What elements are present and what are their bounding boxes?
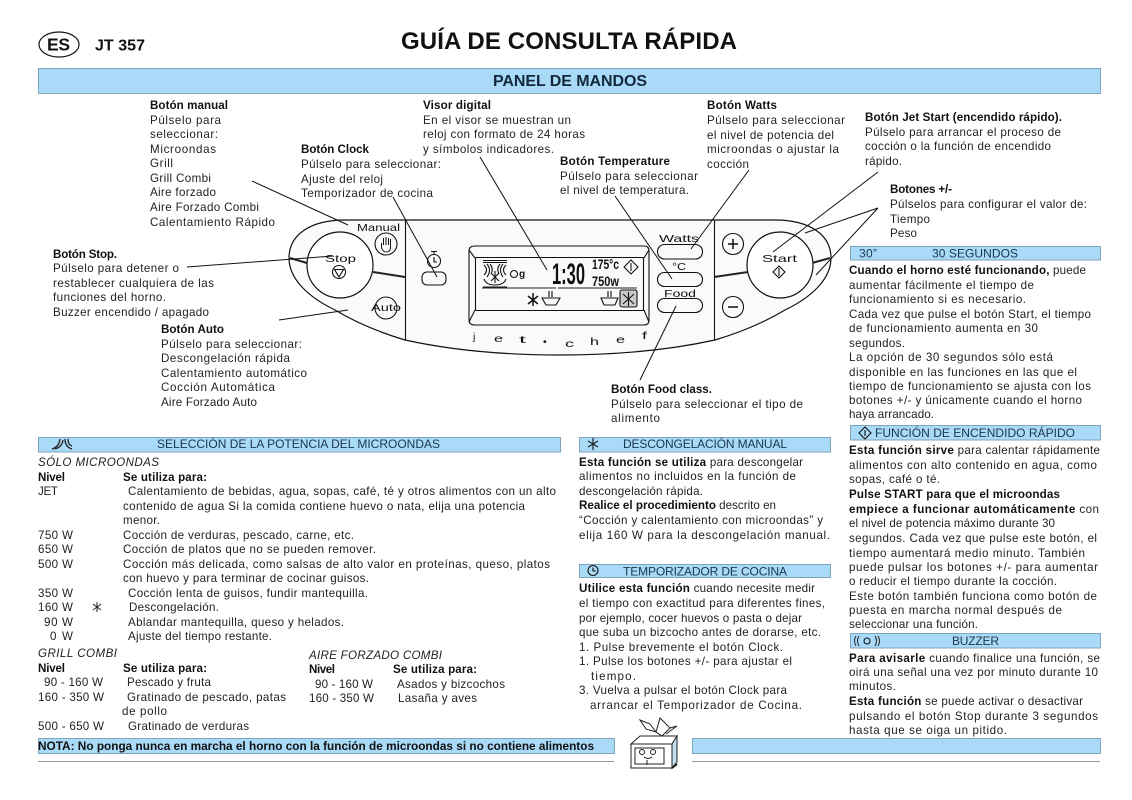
label: botón clock (301, 143, 441, 200)
label: botón clock: Botón Clock (301, 143, 370, 156)
label: botón manual: seleccionar: (150, 128, 218, 141)
label: botón watts: Púlselo para seleccionar (707, 114, 845, 127)
auto button: Auto (371, 302, 401, 314)
text: descongelación manual: Esta función se utiliza para descongelar (579, 456, 803, 469)
table: sólo microondas: Ajuste del tiempo restante. (128, 630, 272, 643)
table: sólo microondas: JET (38, 485, 58, 498)
table: grill combi: Nivel (38, 662, 65, 675)
table: sólo microondas: 90 W (44, 616, 73, 629)
table: sólo microondas: 0 W (50, 630, 73, 643)
icon: weight: g (519, 269, 525, 280)
heading: panel de mandos: PANEL DE MANDOS (493, 73, 647, 90)
table: sólo microondas: 160 W (38, 601, 73, 614)
label: botón auto: Botón Auto (161, 323, 224, 336)
text: función de encendido rápido (849, 444, 1100, 631)
table: grill combi: Gratinado de pescado, patas (127, 691, 286, 704)
table: sólo microondas: SÓLO MICROONDAS (38, 456, 159, 469)
model code: JT 357 (95, 38, 145, 54)
jetchef logo: t (519, 334, 526, 346)
label: botón jet start: cocción o la función de encendido (865, 140, 1051, 153)
text: descongelación manual: Realice el procedimiento descrito en (579, 499, 776, 512)
label: botón jet start (865, 111, 1062, 168)
heading: 30 segundos (850, 246, 1100, 260)
title: GUÍA DE CONSULTA RÁPIDA (401, 27, 737, 55)
manual button (357, 222, 400, 255)
control panel (289, 220, 831, 355)
table: aire forzado combi: Asados y bizcochos (397, 678, 505, 691)
text: 30 segundos: Cuando el horno esté funcionando, puede (849, 264, 1086, 277)
jetchef logo: h (590, 336, 599, 348)
text: 30 segundos: segundos. (849, 337, 905, 350)
label: visor digital: Visor digital (423, 99, 491, 112)
table: grill combi: Se utiliza para: (123, 662, 207, 675)
text: función de encendido rápido: alimentos con alto contenido en agua, como (849, 459, 1097, 472)
table: sólo microondas: Se utiliza para: (123, 471, 207, 484)
text: función de encendido rápido: el nivel de potencia máximo durante 30 (849, 517, 1055, 530)
text: 30 segundos (849, 264, 1091, 421)
plus button (722, 234, 744, 254)
text: temporizador de cocina: el tiempo con exactitud para diferentes fines, (579, 597, 825, 610)
label: botón manual: Calentamiento Rápido (150, 216, 275, 229)
text: temporizador de cocina: Utilice esta función cuando necesite medir (579, 582, 815, 595)
text: 30 segundos: aumentar fácilmente el tiempo de (849, 279, 1034, 292)
table: aire forzado combi: AIRE FORZADO COMBI (308, 649, 443, 662)
table: aire forzado combi: Nivel (309, 663, 335, 676)
label: botón temperature: el nivel de temperatura. (560, 184, 689, 197)
label: botón stop: Buzzer encendido / apagado (53, 306, 209, 319)
table: sólo microondas: menor. (123, 514, 160, 527)
text: 30 segundos: funcionamiento si es necesario. (849, 293, 1026, 306)
label: botón jet start: rápido. (865, 155, 902, 168)
text: 30 segundos: tiempo de funcionamiento se ajusta con los (849, 380, 1091, 393)
text: buzzer: hasta que se oiga un pitido. (849, 724, 1007, 737)
label: botón stop (53, 248, 214, 319)
icon: defrost and bowl (528, 291, 560, 306)
manual button: Manual (357, 222, 400, 234)
text: función de encendido rápido: Este botón también funciona como botón de (849, 590, 1097, 603)
text: función de encendido rápido: tiempo aumentará medio minuto. También (849, 547, 1085, 560)
text: función de encendido rápido: Pulse START para que el microondas (849, 488, 1060, 501)
text: función de encendido rápido: puede pulsar los botones +/- para aumentar (849, 561, 1098, 574)
text: temporizador de cocina: 1. Pulse los botones +/- para ajustar el (579, 655, 792, 668)
label: botón auto: Descongelación rápida (161, 352, 291, 365)
table: grill combi: 160 - 350 W (38, 691, 104, 704)
table: sólo microondas (38, 456, 556, 643)
language badge (39, 32, 79, 57)
label: botón auto: Cocción Automática (161, 381, 276, 394)
table: grill combi: de pollo (122, 705, 167, 718)
text: temporizador de cocina: arrancar el Temporizador de Cocina. (590, 699, 802, 712)
table: sólo microondas: 500 W (38, 558, 73, 571)
label: botones +/- (890, 183, 1087, 240)
watts button (658, 233, 702, 259)
label: botón clock: Ajuste del reloj (301, 173, 383, 186)
power readout: 750w (592, 274, 619, 289)
text: descongelación manual: alimentos no incluidos en la función de (579, 470, 796, 483)
heading: panel de mandos (38, 68, 1100, 94)
jetchef logo: f (642, 330, 647, 342)
heading: buzzer: BUZZER (952, 634, 999, 648)
label: visor digital: reloj con formato de 24 horas (423, 128, 585, 141)
text: función de encendido rápido: empiece a funcionar automáticamente con (849, 503, 1099, 516)
text: descongelación manual: descongelación rápida. (579, 485, 703, 498)
label: botón watts: el nivel de potencia del (707, 129, 834, 142)
temperature readout: 175°c (592, 257, 619, 272)
label: botón food class (611, 383, 803, 425)
note bar: NOTA: No ponga nunca en marcha el horno con la función de microondas si no contiene alimentos (38, 739, 594, 753)
table: grill combi: Gratinado de verduras (128, 720, 249, 733)
table: sólo microondas: Ablandar mantequilla, queso y helados. (128, 616, 344, 629)
label: visor digital (423, 99, 585, 156)
label: botón stop: Púlselo para detener o (53, 262, 179, 275)
jetchef logo: j (472, 331, 475, 343)
text: temporizador de cocina: tiempo. (591, 670, 636, 683)
icon: bowl and fan (601, 290, 637, 307)
text: función de encendido rápido: sopas, café o té. (849, 473, 940, 486)
table: sólo microondas: 350 W (38, 587, 73, 600)
table: grill combi: 500 - 650 W (38, 720, 104, 733)
label: botón stop: funciones del horno. (53, 291, 166, 304)
text: 30 segundos: disponible en las funciones en las que el (849, 366, 1077, 379)
text: función de encendido rápido: segundos. Cada vez que pulse este botón, el (849, 532, 1097, 545)
temperature button (658, 261, 702, 286)
label: botón jet start: Púlselo para arrancar el proceso de (865, 126, 1061, 139)
label: botón manual: Botón manual (150, 99, 228, 112)
table: sólo microondas: contenido de agua Si la comida contiene huevo o nata, elija una potencia (123, 500, 526, 513)
jetchef logo: e (616, 334, 625, 346)
label: botón auto: Calentamiento automático (161, 367, 307, 380)
label: botón temperature: Botón Temperature (560, 155, 671, 168)
text: buzzer: oirá una señal una vez por minuto durante 10 (849, 666, 1098, 679)
label: botón stop: restablecer cualquiera de las (53, 277, 214, 290)
label: botón auto: Aire Forzado Auto (161, 396, 257, 409)
watts button: Watts (659, 233, 699, 245)
text: función de encendido rápido: seleccionar una función. (849, 618, 978, 631)
heading: selección de la potencia (38, 436, 560, 452)
icon: start diamond (624, 260, 638, 274)
table: aire forzado combi (308, 649, 505, 705)
right note bar (692, 738, 1100, 754)
label: botón watts: cocción (707, 158, 749, 171)
jetchef logo: e (494, 333, 503, 345)
heading: selección de la potencia: SELECCIÓN DE LA POTENCIA DEL MICROONDAS (157, 436, 440, 451)
text: buzzer: pulsando el botón Stop durante 3 segundos (849, 710, 1098, 723)
text: descongelación manual: “Cocción y calentamiento con microondas” y (579, 514, 823, 527)
minus button (722, 296, 744, 318)
text: temporizador de cocina: por ejemplo, cocer huevos o pasta o dejar (579, 612, 802, 625)
text: temporizador de cocina: que suba un bizcocho antes de dorarse, etc. (579, 626, 821, 639)
table: grill combi (38, 647, 286, 733)
label: botón watts (707, 99, 845, 171)
label: visor digital: y símbolos indicadores. (423, 143, 554, 156)
label: botón manual: Grill Combi (150, 172, 211, 185)
icon: microwave mascot (631, 718, 677, 768)
stop button (307, 232, 373, 298)
table: sólo microondas: Descongelación. (129, 601, 219, 614)
food button: Food (664, 288, 696, 300)
table: sólo microondas: 750 W (38, 529, 73, 542)
label: botón temperature: Púlselo para seleccionar (560, 170, 698, 183)
label: botón manual: Grill (150, 157, 173, 170)
jetchef logo (472, 330, 647, 350)
label: botón manual: Aire forzado (150, 186, 216, 199)
label: botones +/-: Púlselos para configurar el valor de: (890, 198, 1087, 211)
text: función de encendido rápido: Esta función sirve para calentar rápidamente (849, 444, 1100, 457)
time readout: 1:30 (552, 258, 585, 291)
table: grill combi: GRILL COMBI (38, 647, 118, 660)
start button (747, 232, 813, 298)
table: sólo microondas: Cocción de platos que no se pueden remover. (123, 543, 376, 556)
text: buzzer (849, 652, 1100, 737)
text: función de encendido rápido: o reducir el tiempo durante la cocción. (849, 575, 1057, 588)
label: botón manual: Aire Forzado Combi (150, 201, 259, 214)
text: temporizador de cocina (579, 582, 825, 712)
label: botón watts: microondas o ajustar la (707, 143, 840, 156)
start button: Start (762, 253, 797, 265)
label: botón watts: Botón Watts (707, 99, 777, 112)
digital display (469, 246, 649, 325)
table: sólo microondas: Cocción más delicada, como salsas de alto valor en proteínas, queso, platos (123, 558, 550, 571)
temperature button: °C (672, 261, 686, 273)
label: botón clock: Temporizador de cocina (301, 187, 434, 200)
table: sólo microondas: Cocción lenta de guisos, fundir mantequilla. (128, 587, 368, 600)
text: descongelación manual: elija 160 W para la descongelación manual. (579, 529, 830, 542)
table: aire forzado combi: Lasaña y aves (398, 692, 477, 705)
callout leader lines (187, 157, 878, 380)
table: sólo microondas: 650 W (38, 543, 73, 556)
label: botones +/-: Botones +/- (890, 183, 952, 196)
language badge: ES (47, 34, 70, 54)
label: botón food class: Púlselo para seleccionar el tipo de (611, 398, 803, 411)
text: descongelación manual (579, 456, 830, 542)
text: 30 segundos: La opción de 30 segundos sólo está (849, 351, 1054, 364)
icon: weight (510, 269, 525, 280)
label: botón stop: Botón Stop. (53, 248, 117, 261)
table: aire forzado combi: Se utiliza para: (393, 663, 477, 676)
label: botones +/-: Peso (890, 227, 917, 240)
table: sólo microondas: Calentamiento de bebidas, agua, sopas, café, té y otros alimentos con un alto (128, 485, 556, 498)
stop button: Stop (325, 253, 356, 265)
label: botón jet start: Botón Jet Start (encendido rápido). (865, 111, 1062, 124)
label: botón manual: Microondas (150, 143, 216, 156)
table: sólo microondas: Cocción de verduras, pescado, carne, etc. (123, 529, 354, 542)
label: botón manual: Púlselo para (150, 114, 222, 127)
text: función de encendido rápido: puesta en marcha normal después de (849, 604, 1062, 617)
table: sólo microondas: con huevo y para terminar de cocinar guisos. (123, 572, 369, 585)
text: buzzer: Para avisarle cuando finalice una función, se (849, 652, 1100, 665)
jetchef logo: • (543, 336, 547, 348)
label: botón auto: Púlselo para seleccionar: (161, 338, 302, 351)
clock button (422, 252, 446, 285)
icon: microwave waves (483, 260, 507, 287)
label: botón temperature (560, 155, 698, 197)
text: 30 segundos: de funcionamiento aumenta en 30 (849, 322, 1038, 335)
label: botones +/-: Tiempo (890, 213, 930, 226)
table: grill combi: Pescado y fruta (127, 676, 212, 689)
label: visor digital: En el visor se muestran un (423, 114, 571, 127)
text: temporizador de cocina: 3. Vuelva a pulsar el botón Clock para (579, 684, 788, 697)
label: botón auto (161, 323, 307, 409)
text: buzzer: minutos. (849, 680, 896, 693)
table: sólo microondas: Nivel (38, 471, 65, 484)
table: grill combi: 90 - 160 W (44, 676, 103, 689)
text: buzzer: Esta función se puede activar o desactivar (849, 695, 1083, 708)
heading: función de encendido rápido: FUNCIÓN DE ENCENDIDO RÁPIDO (875, 425, 1075, 440)
label: botón food class: alimento (611, 412, 660, 425)
table: aire forzado combi: 160 - 350 W (309, 692, 374, 705)
table: aire forzado combi: 90 - 160 W (315, 678, 373, 691)
heading: buzzer (850, 634, 1100, 648)
label: botón manual (150, 99, 275, 229)
jetchef logo: c (565, 338, 574, 350)
heading: 30 segundos: 30 SEGUNDOS (932, 246, 1018, 260)
text: temporizador de cocina: 1. Pulse brevemente el botón Clock. (579, 641, 783, 654)
heading: descongelación manual: DESCONGELACIÓN MANUAL (623, 436, 787, 451)
food button (658, 288, 702, 312)
heading: temporizador de cocina (580, 564, 830, 578)
heading: temporizador de cocina: TEMPORIZADOR DE COCINA (623, 564, 787, 578)
text: 30 segundos: botones +/- y únicamente cuando el horno (849, 394, 1082, 407)
auto button (371, 297, 401, 319)
text: 30 segundos: Cada vez que pulse el botón Start, el tiempo (849, 308, 1091, 321)
heading: 30 segundos: 30” (859, 246, 877, 260)
heading: descongelación manual (580, 436, 830, 452)
label: botón food class: Botón Food class. (611, 383, 712, 396)
label: botón clock: Púlselo para seleccionar: (301, 158, 441, 171)
text: 30 segundos: haya arrancado. (849, 408, 934, 421)
